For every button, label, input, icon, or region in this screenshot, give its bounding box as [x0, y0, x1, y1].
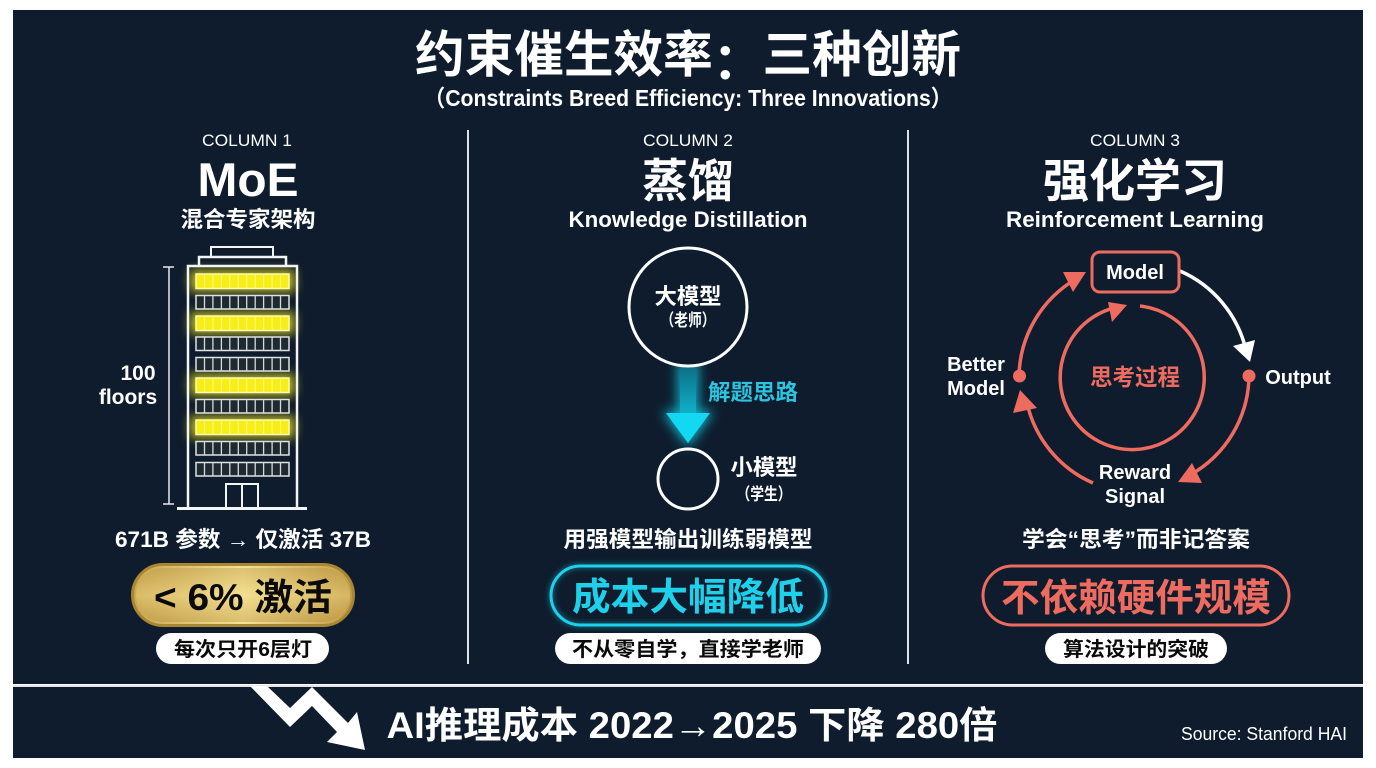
student label: 小模型: [730, 455, 798, 480]
nodes: [1013, 370, 1256, 382]
dimension line: building height: [163, 267, 174, 504]
student label: （学生）: [736, 484, 792, 504]
column label: COLUMN 3: [1090, 131, 1180, 150]
panel: column 3 reinforcement learning: [947, 131, 1331, 664]
icon: building with lit floors: [177, 247, 307, 508]
footer band: [13, 685, 1363, 758]
arrow: knowledge transfer: [662, 362, 714, 447]
cyan pill: 成本大幅降低: [572, 577, 804, 619]
heading: 蒸馏: 蒸馏: [642, 155, 734, 207]
cyan pill: [551, 566, 826, 625]
white note pill: [1045, 633, 1227, 664]
heading: 强化学习: 强化学习: [1043, 155, 1227, 207]
inner cycle: thinking process: 思考过程: [1090, 364, 1180, 390]
subheading: 混合专家架构: [180, 207, 316, 232]
red pill: 不依赖硬件规模: [1001, 578, 1271, 620]
white note pill: [156, 633, 329, 664]
large circle: teacher model: 大模型: [654, 284, 722, 309]
label: better model: [947, 354, 1005, 400]
description text: 用强模型输出训练弱模型: [564, 527, 812, 552]
subheading: Knowledge Distillation: [568, 207, 808, 232]
large circle: teacher model: （老师）: [660, 311, 716, 330]
title: 约束催生效率: [415, 27, 715, 83]
diagram: teacher to student: [629, 248, 798, 509]
model box: [1092, 252, 1179, 292]
arrow: reward to better model: [1013, 390, 1093, 483]
white note pill: [555, 633, 821, 664]
panel: column 1 MoE: [99, 131, 371, 664]
small circle: student model: [658, 449, 718, 509]
diagram: reinforcement cycle: [947, 252, 1331, 508]
stat text: 671B 参数 → 仅激活 37B: [115, 527, 371, 552]
icon: downward zigzag arrow: [250, 686, 365, 750]
arrow label: 解题思路: [708, 380, 798, 405]
label: better model: Model: [947, 378, 1005, 400]
arrow: model to output: [1180, 271, 1255, 362]
heading: MoE: MoE: [198, 153, 298, 206]
student label: [730, 455, 798, 504]
label: 100 floors: 100: [120, 362, 156, 385]
arrow: better model to model: [1019, 272, 1086, 376]
label: reward signal: Reward: [1099, 462, 1171, 484]
footer headline: AI推理成本 2022→2025 下降 280倍: [386, 705, 998, 746]
column label: COLUMN 1: [202, 131, 292, 150]
arrow: output to reward: [1178, 376, 1249, 483]
white note pill: 不从零自学，直接学老师: [572, 638, 804, 661]
description text: 学会“思考”而非记答案: [1022, 527, 1250, 552]
title: ：: [713, 34, 762, 90]
red pill: [983, 566, 1289, 625]
source note: Source: Stanford HAI: [1181, 724, 1347, 744]
label: 100 floors: floors: [99, 386, 157, 409]
label: better model: Better: [947, 354, 1005, 376]
gold pill: [132, 564, 354, 626]
inner cycle: thinking process: [1060, 302, 1204, 450]
title: 三种创新: [762, 27, 961, 83]
label: reward signal: [1099, 462, 1171, 508]
white note pill: 每次只开6层灯: [174, 638, 312, 661]
label: reward signal: Signal: [1105, 486, 1165, 508]
subtitle: （Constraints Breed Efficiency: Three Innovations）: [424, 85, 952, 111]
panel: column 2 distillation: [551, 131, 826, 664]
column label: COLUMN 2: [643, 131, 733, 150]
large circle: teacher model: [629, 248, 747, 366]
label: 100 floors: [99, 362, 157, 409]
white note pill: 算法设计的突破: [1063, 637, 1209, 661]
gold pill: < 6% 激活: [154, 577, 332, 618]
subheading: Reinforcement Learning: [1006, 207, 1264, 232]
model box: Model: [1106, 262, 1164, 284]
label: output: Output: [1265, 367, 1331, 389]
